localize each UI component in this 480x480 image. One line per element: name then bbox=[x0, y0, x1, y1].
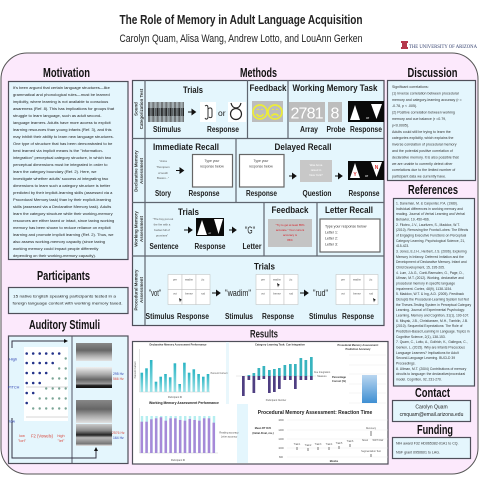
panel: motivation: may inhibit their ability to learn new language structures. bbox=[13, 134, 114, 139]
logo: University of Arizona bbox=[401, 41, 477, 50]
response grid 1 bbox=[168, 274, 210, 304]
panel: references: model. Cognition, 92, 231-270. bbox=[396, 378, 442, 382]
panel: motivation: predicted by their implicit-learning skills (assessed via a bbox=[13, 190, 113, 195]
chart: procedural memory assessment prediction accuracy bbox=[332, 343, 386, 403]
chart: working memory assessment performance: Reading accuracy bbox=[219, 432, 239, 434]
working memory task: Probe bbox=[326, 125, 346, 134]
working memory task bbox=[289, 83, 384, 134]
side label: procedural memory assessment: Assessment bbox=[139, 277, 144, 303]
panel: motivation: dimensions to learn such a category structure is better bbox=[13, 183, 111, 188]
panel: discussion: we are unable to currently detect other bbox=[392, 162, 453, 166]
spectrograms: 295 Hz bbox=[113, 372, 124, 376]
row: immediate recall: Response bbox=[188, 189, 220, 198]
panel: discussion: inverse correlation of procedural memory bbox=[392, 143, 457, 147]
panel: references: 6. Misyak, J.B., Christiansen, M.H., Tomblin, J.B. bbox=[396, 319, 468, 323]
row: feedback: Feedback bbox=[250, 83, 287, 94]
row: procedural memory trials: Response bbox=[262, 312, 295, 321]
response grid 1: per bbox=[173, 278, 177, 282]
panel: references: 3. Jones, E.J.H., Herbert, J.S. (2006). Exploring bbox=[396, 250, 467, 254]
chart: declarative memory assessment performance: Declarative Memory Assessment Performance bbox=[150, 342, 207, 346]
heading: results: Results bbox=[250, 328, 278, 340]
title: The Role of Memory in Adult Language Acquisition bbox=[120, 12, 363, 27]
row: letter recall: Letter 1: bbox=[325, 230, 338, 234]
panel: references: of Engaging Executive Functions on Perceptual bbox=[396, 234, 467, 238]
row: working memory trials: promises" bbox=[156, 234, 168, 238]
working memory task: Array bbox=[300, 125, 319, 134]
heading: auditory stimuli: Auditory Stimuli bbox=[29, 318, 100, 332]
row: letter recall: Letter Recall bbox=[325, 205, 373, 216]
axis labels: High bbox=[9, 356, 17, 362]
panel: results bbox=[132, 342, 388, 464]
icon: response triangles with letters: Y bbox=[353, 172, 357, 178]
row: immediate recall: of south bbox=[158, 171, 168, 175]
row: working memory feedback: 86% bbox=[287, 238, 293, 242]
response grid 1: rud bbox=[201, 292, 205, 296]
row: delayed recall: Type your bbox=[254, 159, 269, 163]
chart: category learning task cue integration: Category Learning Task: Cue Integration bbox=[255, 342, 305, 346]
panel: motivation: memory has been shown to reduce reliance on explicit bbox=[13, 225, 112, 230]
panel: motivation: perceptual dimensions must be integrated in order to bbox=[13, 162, 108, 167]
row: sound categorization trials: Trials bbox=[183, 85, 203, 96]
working memory task: Response bbox=[350, 125, 383, 134]
panel: references: Development of Declarative Memory. Infant and bbox=[396, 260, 467, 264]
chart: category learning task cue integration bbox=[236, 342, 331, 402]
chart: procedural memory assessment reaction time: 1200 bbox=[278, 438, 284, 441]
panel: references: Disrupts the Procedural-Learning System but Not bbox=[396, 298, 469, 302]
panel: references: (2010). Sequential Expectations: The Role of bbox=[396, 324, 463, 328]
panel: references: impairment. Cortex, 48(9), 1138-1154. bbox=[396, 287, 452, 291]
row: working memory trials: Trials bbox=[178, 207, 199, 218]
row: delayed recall: Delayed Recall bbox=[274, 142, 332, 153]
response grid 3 bbox=[336, 274, 378, 304]
panel: motivation: also assess working-memory capacity (since taxing bbox=[13, 239, 105, 244]
panel: references: 4. Lum, J.A.G., Conti-Ramsden, G., Page, D., bbox=[396, 271, 464, 275]
heading: references: References bbox=[408, 183, 458, 197]
row: working memory trials: Response bbox=[194, 242, 226, 251]
panel: methods bbox=[132, 80, 384, 326]
row: letter recall: Letter 2: bbox=[325, 236, 338, 240]
chart: procedural memory assessment prediction accuracy: Percentage bbox=[332, 375, 347, 379]
heading: funding: Funding bbox=[417, 423, 453, 437]
panel: motivation: One type of structure that has been demonstrated to be bbox=[13, 141, 113, 146]
side label: declarative memory assessment: Assessment bbox=[139, 158, 144, 184]
spectrograms: 566 Hz bbox=[113, 377, 124, 381]
panel: references: 415-423. bbox=[396, 244, 409, 248]
spectrograms: 2576 Hz bbox=[112, 431, 125, 435]
working memory task: Working Memory Task bbox=[292, 83, 378, 94]
panel: references: Individual differences in working memory and bbox=[396, 207, 463, 211]
heading: motivation: Motivation bbox=[43, 66, 90, 80]
chart: working memory assessment performance: Participant ID bbox=[171, 459, 185, 462]
panel: motivation: learning resources than young infants (Ref. 3), and this bbox=[13, 127, 112, 132]
panel: references: circuits to language: the declarative/procedural bbox=[396, 372, 465, 376]
panel: motivation: Procedural Memory task) than by their explicit-learning bbox=[13, 197, 111, 202]
icon: response triangles: or bbox=[366, 116, 370, 120]
response grid 3: benez bbox=[353, 292, 361, 296]
row: procedural memory trials: Trials bbox=[254, 262, 275, 272]
axis labels bbox=[8, 356, 65, 443]
panel: motivation bbox=[8, 82, 128, 260]
row: procedural memory trials: Response bbox=[177, 312, 210, 321]
panel: references: 8. Ullman, M.T. (2004) Contributions of memory bbox=[396, 367, 467, 371]
response grid 2: per bbox=[261, 278, 265, 282]
chart: procedural memory assessment prediction accuracy: Prediction Accuracy bbox=[346, 347, 371, 351]
panel: references: the Theses-Testing System in Perceptual Category bbox=[396, 303, 472, 307]
row: sound categorization trials: Response bbox=[207, 125, 240, 134]
chart: procedural memory assessment reaction time: (Initial-Final, ms.) bbox=[252, 431, 274, 435]
chart: procedural memory assessment reaction time: Train2 bbox=[305, 444, 312, 447]
chart: declarative memory assessment performance: Percent Correct bbox=[211, 372, 228, 375]
row: letter recall: Type your response below bbox=[325, 224, 367, 228]
row: procedural memory trials: Response bbox=[342, 312, 375, 321]
arrow bbox=[229, 228, 236, 232]
chart: category learning task cue integration: Cue Integration bbox=[314, 371, 331, 374]
panel: references: 1. Daneman, M. & Carpenter, P.A. (1980). bbox=[396, 202, 458, 206]
panel: participants bbox=[8, 288, 128, 314]
side label: sound categorization test: Sound bbox=[134, 102, 138, 116]
panel: discussion: categories explicitly, which explains the bbox=[392, 136, 453, 140]
vowel space plot bbox=[24, 347, 68, 421]
row: working memory feedback: accuracy is bbox=[283, 233, 298, 237]
icon: response triangles: or bbox=[208, 231, 211, 235]
row: delayed recall: response below bbox=[249, 164, 273, 168]
row: immediate recall: "Anna bbox=[159, 159, 167, 163]
panel: funding: NIH award F32 HD065382-01A1 to CQ. bbox=[396, 442, 459, 446]
chart: procedural memory assessment reaction time: Train5 bbox=[336, 442, 343, 445]
row: immediate recall: response below bbox=[200, 164, 224, 168]
axis labels: low bbox=[9, 418, 15, 424]
panel: funding bbox=[392, 438, 470, 458]
panel: discussion bbox=[388, 80, 476, 180]
panel: discussion: memory and category-learning accuracy (r = bbox=[392, 98, 462, 102]
row: sound categorization trials: Stimulus bbox=[153, 125, 182, 134]
response grid 2: jic bbox=[289, 278, 293, 282]
icon: smiley bbox=[253, 105, 282, 119]
side label: working memory assessment: Working Memory bbox=[134, 211, 138, 247]
chart: procedural memory assessment reaction time: WDT Distr bbox=[373, 439, 384, 442]
panel: motivation: investigate whether adults' success at integrating two bbox=[13, 176, 109, 181]
chart: working memory assessment performance: Working Memory Assessment Performance bbox=[149, 401, 219, 405]
panel: participants: foreign language context with working memory taxed. bbox=[12, 300, 123, 306]
axis labels: F2 (Vowels) bbox=[31, 434, 54, 438]
row: letter recall: Letter 3: bbox=[325, 242, 338, 246]
panel: discussion: Adults could still be trying to learn the bbox=[392, 130, 451, 134]
panel: motivation: struggle to learn language, such as adult second- bbox=[13, 113, 102, 118]
panel: discussion: (1) Inverse correlation between procedural bbox=[392, 91, 459, 95]
chart: procedural memory assessment reaction time: Mean RT Diff. bbox=[255, 426, 272, 430]
panel: discussion: and the potential positive correlation of bbox=[392, 149, 453, 153]
chart: procedural memory assessment reaction time: 800 bbox=[279, 456, 284, 459]
panel: motivation: language learners. Adults have more access to explicit bbox=[13, 120, 112, 125]
panel: references: Learning. Journal of Experimental Psychology: bbox=[396, 308, 465, 312]
panel: references: (2010). Removing the Frontal Lobes: The Effects bbox=[396, 228, 469, 232]
panel: contact bbox=[392, 400, 470, 422]
chart: procedural memory assessment reaction time: Blocks bbox=[330, 459, 339, 463]
row: delayed recall bbox=[240, 142, 384, 198]
chart: procedural memory assessment reaction time: Recovery bbox=[366, 427, 377, 430]
side label: sound categorization test: Categorization Test bbox=[139, 88, 144, 129]
panel: references: Language Learners? Implications for Adult bbox=[396, 351, 459, 355]
row: immediate recall: Type your bbox=[205, 159, 220, 163]
panel: motivation: learn the category structure while their working-memory bbox=[13, 211, 114, 216]
icon: response triangles with letters bbox=[348, 161, 384, 180]
row: delayed recall: New York? bbox=[309, 173, 323, 177]
chart: working memory assessment performance bbox=[140, 401, 239, 462]
heading: contact: Contact bbox=[415, 386, 451, 400]
panel: references: Child Development, 15, 195-205. bbox=[396, 266, 445, 270]
row: procedural memory trials: Stimulus bbox=[225, 312, 254, 321]
response grid 2: rud bbox=[289, 292, 293, 296]
response grid 1: wadim bbox=[185, 278, 194, 282]
arrow bbox=[300, 290, 308, 296]
response grid 1: jic bbox=[201, 278, 205, 282]
row: delayed recall: Was Anna bbox=[310, 163, 323, 167]
row: sound categorization trials bbox=[148, 85, 246, 134]
response grid 1: vot bbox=[173, 292, 177, 296]
panel: references: reading. Journal of Verbal Learning and Verbal bbox=[396, 212, 465, 216]
panel: motivation: depending on their working-memory capacity). bbox=[13, 253, 96, 258]
axis labels: PITCH bbox=[8, 386, 20, 390]
row: working memory trials: Letter bbox=[242, 242, 262, 251]
panel: contact: cmquam@email.arizona.edu bbox=[400, 412, 464, 418]
icon: stimulus waveform bbox=[148, 102, 184, 122]
panel: motivation: integration" perceptual category structure, in which two bbox=[13, 155, 112, 160]
panel: references: Memory in Infancy: Deferred Imitation and the bbox=[396, 255, 464, 259]
panel: discussion: p<0.0005). bbox=[392, 123, 409, 127]
row: immediate recall: Thompson bbox=[156, 165, 170, 169]
response grid 1: benez bbox=[185, 292, 193, 296]
panel: motivation: resources are either taxed or intact, since taxing working bbox=[13, 218, 114, 223]
panel: discussion: correlations due to the limited number of bbox=[392, 168, 455, 172]
row: procedural memory trials: Stimulus bbox=[146, 312, 175, 321]
panel: discussion: -0.78, p < .005). bbox=[392, 104, 417, 108]
chart: working memory assessment performance: Letter accuracy bbox=[221, 436, 238, 438]
heading: discussion: Discussion bbox=[408, 66, 458, 80]
row: procedural memory trials: "wadim" bbox=[225, 288, 251, 298]
panel: discussion: memory and cue balance (r =0.79, bbox=[392, 117, 446, 121]
panel: references: 7. Quam, C., Lotto, A., Gollrich, K., Gallegos, C., bbox=[396, 340, 468, 344]
panel: references bbox=[394, 198, 474, 386]
chart: category learning task cue integration: Participant Number bbox=[266, 399, 286, 402]
panel: references: Gerken, L. (2015). Why are Infants Precocious bbox=[396, 346, 465, 350]
panel: participants: 15 native English speaking participants tested in a bbox=[13, 294, 117, 298]
row: delayed recall: raised in bbox=[311, 168, 322, 172]
icon: response triangles with letters: N bbox=[375, 165, 379, 171]
response grid 3: rud bbox=[369, 292, 373, 296]
spectrograms bbox=[76, 343, 125, 446]
arrow bbox=[184, 228, 192, 232]
authors: Carolyn Quam, Alisa Wang, Andrew Lotto, and LouAnn Gerken bbox=[120, 33, 362, 45]
arrow bbox=[335, 174, 342, 178]
row: working memory trials: bucket full of bbox=[154, 228, 170, 232]
row: procedural memory trials bbox=[146, 262, 378, 321]
panel: discussion: Significant correlations: bbox=[392, 85, 429, 89]
panel: references: Proceedings. bbox=[396, 362, 416, 366]
icon: response triangles with letters: or bbox=[365, 174, 369, 178]
spectrograms: 164 Hz bbox=[113, 436, 124, 440]
side label: declarative memory assessment: Declarative Memory bbox=[134, 150, 138, 192]
panel: funding: NSF grant 0950601 to LAG. bbox=[396, 450, 440, 454]
chart: declarative memory assessment performance: Participant ID bbox=[168, 396, 182, 399]
panel: references: Second-Language Learning. BUCLD 39 bbox=[396, 356, 455, 360]
row: procedural memory trials: Stimulus bbox=[309, 312, 338, 321]
icon: response symbols: or bbox=[218, 108, 226, 118]
row: working memory trials: the fire with a bbox=[154, 222, 171, 226]
axis labels: low bbox=[19, 434, 25, 438]
chart: procedural memory assessment reaction time: 1000 bbox=[278, 447, 284, 450]
heading: methods: Methods bbox=[240, 66, 277, 80]
chart: procedural memory assessment reaction time bbox=[252, 410, 388, 463]
panel: references: Category Learning. Psychological Science, 21, bbox=[396, 239, 465, 243]
chart: procedural memory assessment reaction time: Train3 bbox=[315, 443, 322, 446]
chart: procedural memory assessment reaction time: Segmentation Test bbox=[361, 450, 381, 453]
panel: motivation: best learned via implicit means is the "information- bbox=[13, 148, 104, 153]
row: working memory trials: "G" bbox=[245, 226, 255, 236]
panel: discussion: participant data we currently have. bbox=[392, 175, 446, 179]
row: procedural memory trials: "vot" bbox=[149, 288, 161, 298]
chart: procedural memory assessment prediction accuracy: Procedural Memory Assessment: bbox=[338, 343, 379, 347]
response grid 3: jic bbox=[369, 278, 373, 282]
chart: procedural memory assessment reaction time: 1400 bbox=[278, 429, 284, 432]
chart: procedural memory assessment reaction time: Novel bbox=[362, 439, 369, 442]
row: working memory feedback: Feedback bbox=[272, 205, 309, 216]
panel: references: 5. Maddox, W.T. & Ing, A.D. (2005). Feedback bbox=[396, 292, 464, 296]
side label: procedural memory assessment: Procedural Memory bbox=[134, 270, 138, 310]
chart: declarative memory assessment performance bbox=[134, 342, 228, 399]
row: procedural memory trials: "rud" bbox=[313, 288, 328, 298]
row: immediate recall: Immediate Recall bbox=[153, 142, 219, 153]
panel: auditory stimuli bbox=[8, 336, 128, 464]
side label: working memory assessment: Assessment bbox=[139, 216, 144, 242]
row: delayed recall: Response bbox=[246, 189, 278, 198]
chart: procedural memory assessment reaction time: Procedural Memory Assessment: Reaction Time bbox=[258, 410, 372, 416]
row: working memory feedback: accurate." Your current bbox=[276, 228, 304, 232]
row: working memory trials: "The boy put out bbox=[153, 217, 173, 221]
axis labels: "lort" bbox=[18, 439, 27, 443]
chart: category learning task cue integration: Measure bbox=[317, 375, 327, 378]
panel: references: procedural memory in specific language bbox=[396, 282, 455, 286]
row: working memory feedback: "Try to get at least 85% bbox=[276, 223, 305, 227]
row: delayed recall: Response bbox=[348, 189, 380, 198]
heading: participants: Participants bbox=[37, 269, 90, 283]
panel: discussion: declarative memory. It is also possible that bbox=[392, 155, 459, 159]
chart: procedural memory assessment reaction time: Train4 bbox=[326, 443, 333, 446]
panel: references: Cognitive Science, 2(1), 138-153. bbox=[396, 335, 446, 339]
row: immediate recall: Story bbox=[155, 189, 172, 198]
row: feedback bbox=[250, 83, 287, 122]
response grid 3: per bbox=[341, 278, 345, 282]
panel: references: Behavior, 19, 450-466. bbox=[396, 218, 430, 222]
chart: procedural memory assessment reaction time: 1600 bbox=[278, 419, 284, 422]
row: working memory trials bbox=[150, 207, 262, 251]
panel: motivation: learn the category boundary (Ref. 2). Here, we bbox=[13, 169, 97, 174]
response grid 2: benez bbox=[273, 292, 281, 296]
response grid 2 bbox=[256, 274, 298, 304]
pale separators bbox=[226, 342, 229, 404]
chart: procedural memory assessment reaction time: Train1 bbox=[294, 443, 301, 446]
axis labels: "let" bbox=[58, 439, 65, 443]
panel: motivation: grammatical and phonological rules—must be learned bbox=[13, 92, 110, 97]
panel: discussion: (2) Positive correlation between working bbox=[392, 111, 455, 115]
arrow bbox=[188, 110, 196, 114]
axis arrows bbox=[12, 341, 96, 458]
row: working memory trials: Sentence bbox=[150, 242, 179, 251]
working memory task: 8 bbox=[331, 106, 340, 122]
row: immediate recall: Boston..." bbox=[157, 176, 169, 180]
working memory task: 2781 bbox=[290, 106, 324, 122]
axis labels: high bbox=[57, 434, 65, 438]
arrow bbox=[176, 168, 184, 173]
panel: motivation: awareness (Ref. 8). This has implications for groups that bbox=[13, 106, 115, 111]
panel: motivation: working memory could impact people differently bbox=[13, 246, 99, 251]
arrow bbox=[212, 290, 220, 296]
panel: motivation: skills (assessed via a Declarative Memory task). Adults bbox=[13, 204, 111, 209]
panel: motivation: learning and promote implicit learning (Ref. 2). Thus, we bbox=[13, 232, 114, 237]
panel: references: Prediction-Based Learning in Language. Topics in bbox=[396, 330, 470, 334]
response grid 2: wadim bbox=[273, 278, 282, 282]
row: working memory feedback bbox=[268, 205, 312, 247]
panel: references: Learning, Memory and Cognition, 31(1), 100-107. bbox=[396, 314, 469, 318]
chart: procedural memory assessment prediction accuracy: Correct (%) bbox=[332, 379, 346, 383]
arrow bbox=[289, 174, 296, 178]
response grid 3: vot bbox=[341, 292, 345, 296]
panel: references: Ullman, M.T. (2012). Working, declarative and bbox=[396, 276, 464, 280]
row: immediate recall bbox=[153, 142, 232, 198]
row: delayed recall: Question bbox=[302, 189, 332, 198]
panel: references: 2. Filoteo, J.V., Lauritzen, S., Maddox, W.T. bbox=[396, 223, 460, 227]
panel: contact: Carolyn Quam bbox=[415, 404, 448, 410]
row: letter recall bbox=[320, 205, 380, 252]
response grid 2: vot bbox=[261, 292, 265, 296]
panel: motivation: implicitly, where learning is not available to conscious bbox=[13, 99, 108, 104]
chart: procedural memory assessment reaction time: Train6 bbox=[347, 440, 354, 443]
chart: declarative memory assessment performance: Percent Correct bbox=[134, 361, 137, 378]
response grid 3: wadim bbox=[353, 278, 362, 282]
panel: motivation: It's been argued that certain language structures—like bbox=[13, 85, 111, 90]
